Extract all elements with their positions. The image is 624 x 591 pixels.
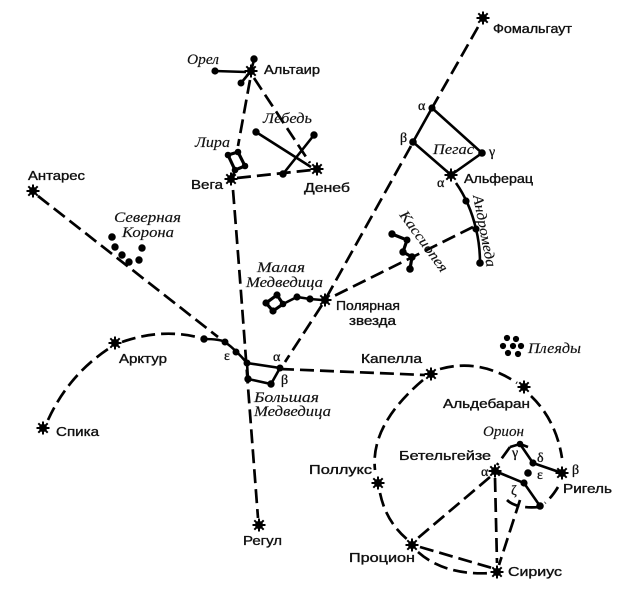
dashed guide lines <box>38 27 562 573</box>
constellation: Северная Корона <box>108 210 181 266</box>
constellation: Пегас: β <box>400 131 407 146</box>
star: Альдебаран <box>443 380 530 411</box>
star: Альтаир <box>244 63 320 78</box>
constellation: Лира: Лира <box>194 135 230 151</box>
constellation: Орион: ζ <box>511 484 517 499</box>
star: Сириус <box>490 565 562 579</box>
star: Полярная звезда: звезда <box>349 314 396 328</box>
constellation: Малая Медведица: Медведица <box>245 275 323 291</box>
star: Ригель: Ригель <box>563 482 612 496</box>
star: Вега: Вега <box>191 178 223 192</box>
star: Капелла: Капелла <box>361 352 422 366</box>
star: Спика: Спика <box>56 425 99 439</box>
constellation: Орион: ε <box>537 468 543 483</box>
star: Поллукс <box>309 463 384 490</box>
constellation: Орион: α <box>481 465 489 480</box>
star: Бетельгейзе: Бетельгейзе <box>399 449 491 463</box>
constellation: Северная Корона: Северная <box>114 210 181 226</box>
star: Фомальгаут <box>476 12 572 36</box>
constellation: Андромеда: Андромеда <box>469 193 499 268</box>
star: Антарес <box>26 169 85 198</box>
star: Поллукс: Поллукс <box>309 463 372 477</box>
constellation: Лира <box>194 135 248 178</box>
constellation: Орион <box>481 424 579 510</box>
constellation: Пегас: γ <box>488 145 495 160</box>
constellation: Плеяды: Плеяды <box>527 341 581 357</box>
star: Ригель <box>556 466 612 496</box>
star: Вега <box>191 172 238 192</box>
star: Процион <box>349 538 418 565</box>
star: Бетельгейзе <box>399 449 502 478</box>
constellation: Орион: δ <box>537 451 544 466</box>
star: Фомальгаут: Фомальгаут <box>493 22 572 36</box>
star: Антарес: Антарес <box>28 169 85 183</box>
constellation: Большая Медведица: β <box>281 373 288 388</box>
star: Арктур: Арктур <box>119 352 167 366</box>
constellation: Орион: γ <box>511 446 518 461</box>
star: Денеб: Денеб <box>304 181 350 195</box>
constellation: Большая Медведица: α <box>273 350 281 365</box>
constellation: Малая Медведица <box>245 260 323 315</box>
star: Спика <box>36 422 99 439</box>
constellation: Пегас <box>400 99 495 191</box>
constellation: Орел <box>187 52 258 86</box>
star: Сириус: Сириус <box>508 565 562 579</box>
constellation: Орел: Орел <box>187 52 219 68</box>
constellation: Большая Медведица: Медведица <box>253 404 331 420</box>
constellation: Пегас: α <box>418 99 426 114</box>
star: Арктур <box>108 336 167 366</box>
constellation: Малая Медведица: Малая <box>256 260 305 276</box>
star: Альферац: Альферац <box>464 172 533 186</box>
star: Альтаир: Альтаир <box>264 63 320 77</box>
constellation: Лебедь <box>252 111 318 178</box>
star: Альдебаран: Альдебаран <box>443 397 530 411</box>
constellation: Плеяды <box>500 335 581 357</box>
constellation: Большая Медведица <box>200 335 331 420</box>
constellation: Лебедь: Лебедь <box>262 111 312 127</box>
constellation: Большая Медведица: Большая <box>253 390 319 406</box>
constellation: Кассиопея: Кассиопея <box>395 207 451 276</box>
star: Регул: Регул <box>243 534 282 548</box>
star: Полярная звезда <box>318 294 400 328</box>
constellation: Орион: Орион <box>483 424 524 440</box>
star: Альферац <box>444 168 533 186</box>
star: Процион: Процион <box>349 551 415 565</box>
constellation: Пегас: α <box>437 176 445 191</box>
star: Капелла <box>361 352 438 380</box>
constellation: Пегас: Пегас <box>432 142 475 158</box>
star: Полярная звезда: Полярная <box>336 299 400 313</box>
constellation: Большая Медведица: ε <box>224 349 230 364</box>
constellation: Андромеда <box>456 183 499 268</box>
constellation: Северная Корона: Корона <box>121 225 174 241</box>
constellation: Орион: β <box>572 463 579 478</box>
star: Регул <box>243 518 282 548</box>
star: Денеб <box>304 162 350 195</box>
